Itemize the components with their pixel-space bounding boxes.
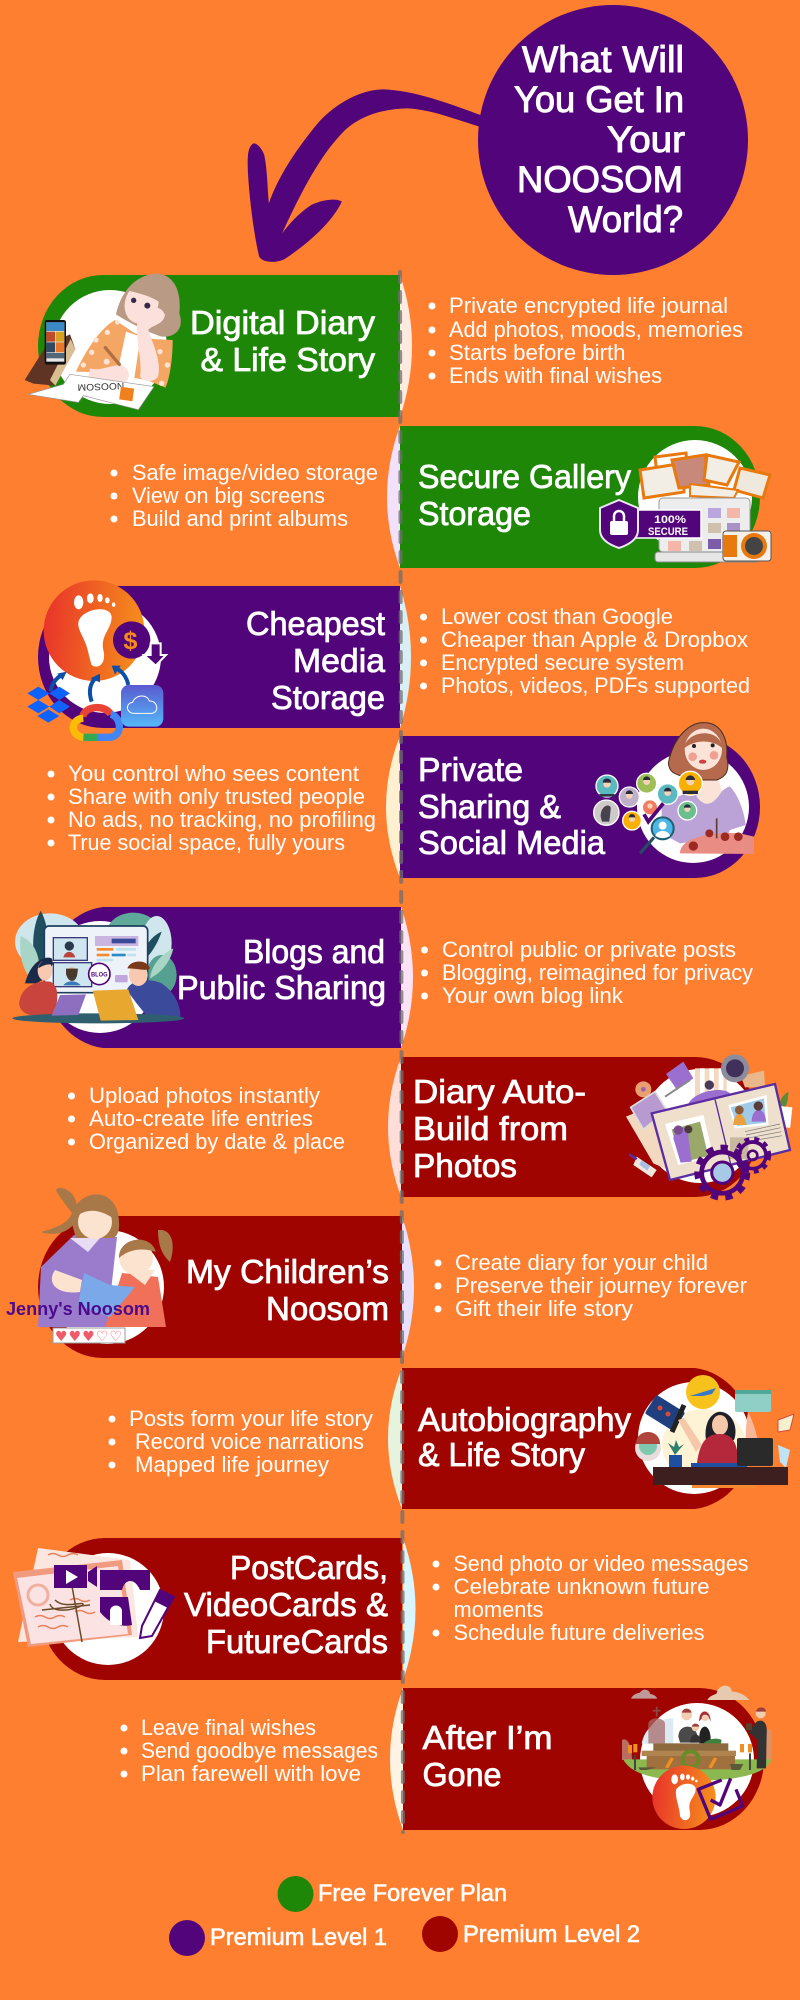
illustration: gallery and secure badge: SECURE [648,526,688,538]
legend: premium level 1: Premium Level 1 [210,1924,387,1951]
lens accent [400,275,412,417]
bullet list [110,460,378,531]
heading: My Children’s [186,1253,389,1290]
heading [177,933,386,1006]
lens accent [390,1688,403,1830]
title text [514,39,685,240]
title text: You Get In [514,79,684,120]
illustration: photo album and gears [626,1054,792,1198]
heading [418,751,606,861]
panel shape [403,1688,764,1830]
heading: Noosom [266,1290,389,1327]
bullet list: Blogging, reimagined for privacy [442,960,753,985]
heading: Autobiography [418,1401,631,1438]
bullet list: Build and print albums [132,506,348,531]
panel shape [38,1216,402,1358]
bullet list: Celebrate unknown future [454,1574,710,1599]
heading [422,1719,552,1793]
bullet list: Lower cost than Google [441,604,673,629]
heading [190,304,376,378]
heading [418,458,631,532]
bullet list: Preserve their journey forever [455,1273,747,1298]
panel shape [38,586,400,728]
heading [418,1401,631,1473]
heading [184,1549,388,1660]
bullet list: Mapped life journey [135,1452,329,1477]
bullet list: Leave final wishes [141,1715,316,1740]
bullet list: Control public or private posts [442,937,736,962]
heading: Diary Auto- [413,1073,586,1110]
bullet list: Gift their life story [455,1296,633,1321]
bullet list: True social space, fully yours [68,830,345,855]
heading: After I’m [422,1719,552,1756]
panel: my children's noosom [6,1188,747,1358]
bullet list: Share with only trusted people [68,784,365,809]
heading [186,1253,389,1327]
heading: Digital Diary [190,304,376,341]
panel: secure gallery storage [110,426,771,568]
lens accent [387,426,400,568]
panel shape [46,907,401,1048]
heading: Build from [413,1110,568,1147]
heading [246,605,386,716]
illustration: woman writing diary: NOOSOM [77,381,124,392]
illustration: woman at desk [635,1375,794,1488]
panel: after i'm gone [120,1686,772,1830]
title text: NOOSOM [517,159,683,200]
legend: premium level 1 [169,1920,387,1956]
white illustration disc [44,921,156,1033]
bullet list: moments [454,1597,544,1622]
bullet list: Photos, videos, PDFs supported [441,673,750,698]
white illustration disc [637,751,749,863]
heading: & Life Story [418,1436,585,1473]
title text: What Will [522,39,684,80]
heading [413,1073,586,1184]
bullet list [420,604,750,698]
panel: private sharing and social media [48,723,760,878]
illustration: people blogging: BLOG [91,972,108,978]
panel: cheapest media storage [27,580,750,737]
illustration: mother and child reading: ♥ ♥ ♥ ♡ ♡ [55,1329,122,1345]
heading: Social Media [418,824,606,861]
heading: Sharing & [418,788,561,825]
illustration: storage comparison [27,580,166,737]
bullet list [120,1715,378,1786]
bullet list: Auto-create life entries [89,1106,313,1131]
legend [169,1876,640,1956]
illustration: storage comparison: $ [123,627,137,655]
bullet list: Send photo or video messages [454,1551,748,1576]
illustration: people blogging [12,911,184,1023]
heading: & Life Story [200,341,376,378]
heading: Public Sharing [177,969,386,1006]
panel shape [400,736,760,878]
bullet list [48,761,376,855]
title badge [478,5,748,275]
legend: premium level 2: Premium Level 2 [463,1921,640,1948]
heading: Secure Gallery [418,458,631,495]
illustration: mother and child reading [6,1188,173,1345]
panel shape [401,1057,760,1197]
bullet list: Organized by date & place [89,1129,345,1154]
lens accent [400,586,411,728]
bullet list: Posts form your life story [129,1406,373,1431]
panel: diary auto-build from photos [68,1054,792,1198]
white illustration disc [638,1382,750,1494]
bullet list [428,293,743,388]
lens accent [388,1057,401,1197]
bullet list: No ads, no tracking, no profiling [68,807,376,832]
lens accent [388,1368,402,1509]
white illustration disc [50,1230,164,1344]
panel shape [402,1368,752,1509]
panel: digital diary and life story [25,274,743,417]
bullet list: Ends with final wishes [449,363,662,388]
heading: Private [418,751,523,788]
heading: VideoCards & [184,1586,388,1623]
bullet list: Send goodbye messages [141,1738,378,1763]
bullet list: Starts before birth [449,340,626,365]
lens accent [403,1538,416,1680]
bullet list [434,1250,747,1321]
heading: Media [293,642,386,679]
arrow from badge to first panel [248,89,482,262]
title text: Your [607,119,685,160]
illustration: gallery and secure badge: 100% [654,514,686,526]
heading: FutureCards [206,1623,388,1660]
illustration: farewell scene [622,1686,772,1829]
bullet list: You control who sees content [68,761,359,786]
white illustration disc [638,440,752,554]
lens accent [401,907,413,1048]
panel shape [400,426,760,568]
illustration: woman writing diary [25,274,181,410]
white illustration disc [640,1703,754,1817]
heading: Blogs and [243,933,385,970]
bullet list: Encrypted secure system [441,650,684,675]
heading: Storage [418,495,531,532]
badge circle [478,5,748,275]
white illustration disc [52,1553,164,1665]
heading: Photos [413,1147,517,1184]
legend: premium level 2 [422,1916,640,1952]
title text: World? [568,199,683,240]
bullet list: Schedule future deliveries [454,1620,704,1645]
illustration: postcards and video icon [13,1548,174,1647]
heading: Gone [422,1756,502,1793]
white illustration disc [49,601,161,713]
lens accent [386,736,400,878]
illustration: mother and child reading: Jenny's Noosom [6,1299,150,1319]
heading: Storage [271,679,385,716]
heading: Cheapest [246,605,385,642]
bullet list: Upload photos instantly [89,1083,320,1108]
bullet list: Add photos, moods, memories [449,317,743,342]
lens accent [402,1216,414,1358]
heading: PostCards, [230,1549,388,1586]
legend: free forever plan: Free Forever Plan [318,1880,507,1907]
bullet list [108,1406,373,1477]
bullet list [432,1551,748,1645]
bullet list: Private encrypted life journal [449,293,728,318]
bullet list [421,937,753,1008]
bullet list: View on big screens [132,483,325,508]
legend: free forever plan [278,1876,507,1912]
panel: blogs and public sharing [12,907,753,1048]
panel: postcards, videocards and futurecards [13,1538,748,1680]
bullet list: Plan farewell with love [141,1761,361,1786]
white illustration disc [53,290,167,404]
illustration: gallery and secure badge [600,453,771,562]
bullet list: Safe image/video storage [132,460,378,485]
white illustration disc [643,1069,757,1183]
illustration: woman and trusted people [594,723,754,854]
panel shape [38,275,400,417]
bullet list: Your own blog link [442,983,624,1008]
bullet list: Cheaper than Apple & Dropbox [441,627,748,652]
panel shape [40,1538,402,1680]
panel: autobiography and life story [108,1368,794,1509]
bullet list: Create diary for your child [455,1250,708,1275]
bullet list [68,1083,345,1154]
bullet list: Record voice narrations [135,1429,364,1454]
